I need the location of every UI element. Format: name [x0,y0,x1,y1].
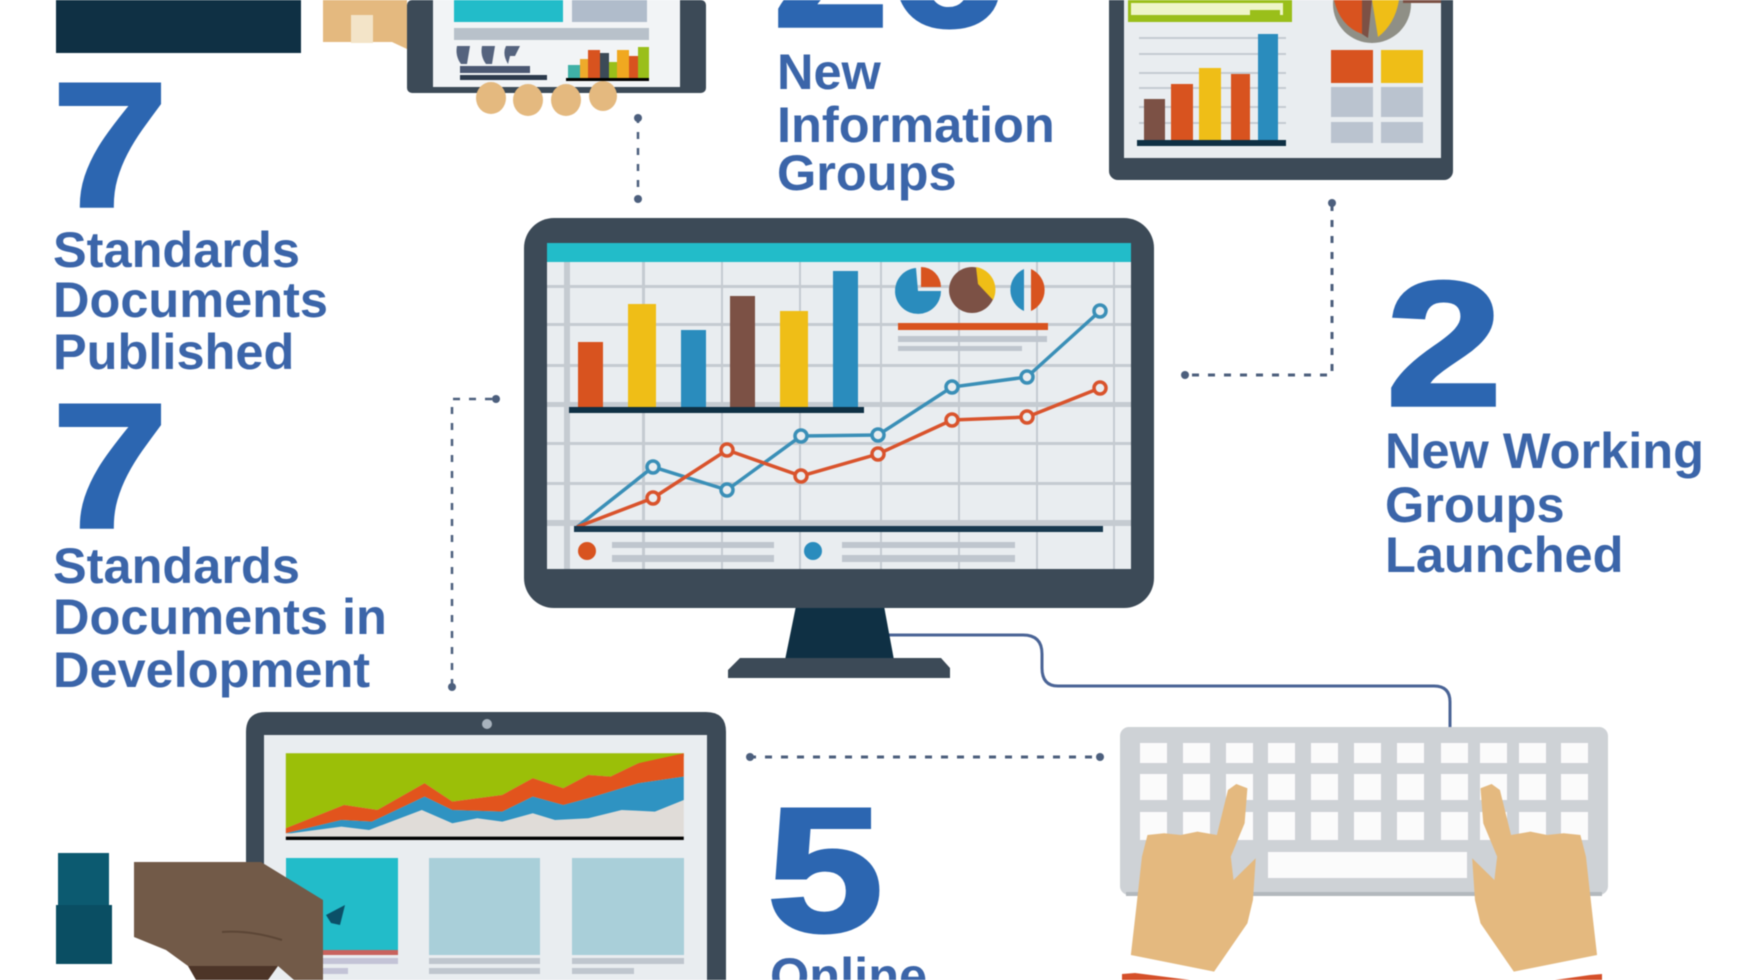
blue line series [577,305,1106,527]
arrow: dotted, bottom tablet to keyboard [746,753,1104,761]
colour and grey tiles [1331,50,1423,143]
label: New Information Groups: Groups [777,144,957,201]
icon: tablet, top right [1109,0,1453,180]
right hand [1472,784,1597,972]
icon: hand pointing at tablet [56,853,323,980]
speech marks row [456,46,520,64]
label: Standards Documents in Development: Documents in [53,588,387,645]
number 7, published: 7 [52,47,168,244]
label: New Working Groups Launched: Groups [1385,476,1565,533]
icon: tablet with area chart, bottom [246,712,726,980]
wrist of hand [323,0,407,49]
grid [547,262,1131,569]
cable from monitor to keyboard [888,635,1450,730]
dark block top left [56,0,301,53]
number 5: 5 [767,772,883,969]
label: Standards Documents Published: Standards [53,221,300,278]
label: New Working Groups Launched: New Working [1385,422,1704,479]
arrow: dotted, right tablet to monitor [1181,199,1336,379]
number 7, in development: 7 [52,368,168,565]
bar chart [1137,34,1286,146]
shirt cuffs [1122,973,1602,980]
icon: desktop monitor with charts [524,218,1154,678]
pie chart caption lines [898,323,1048,351]
teal sleeve [56,853,112,964]
orange line series [577,382,1106,527]
grid lines [1139,37,1286,124]
label: Standards Documents Published: Published [53,323,294,380]
icon: keyboard with typing hands [1120,727,1608,980]
legend [578,542,1015,562]
pie charts [895,267,1045,314]
area chart [286,753,684,840]
monitor stand [728,606,950,678]
label: New Working Groups Launched: Launched [1385,526,1624,583]
number 2: 2 [1386,246,1502,443]
left hand [1131,784,1256,972]
fingers [476,81,617,116]
label: Standards Documents in Development: Development [53,641,370,698]
arrow: dotted, top tablet to monitor [634,114,642,203]
key rows [1140,743,1588,878]
label: New Information Groups: Information [777,96,1055,153]
label: New Information Groups: New [777,43,882,100]
bar chart [569,271,864,413]
label: Standards Documents in Development: Standards [53,537,300,594]
small bar chart [566,47,649,81]
label: Standards Documents Published: Documents [53,271,328,328]
icon: tablet held by hand, top [323,0,706,116]
three panels [286,858,684,974]
pie chart [1333,0,1441,43]
arrow: dotted, bottom tablet to monitor [448,395,500,691]
